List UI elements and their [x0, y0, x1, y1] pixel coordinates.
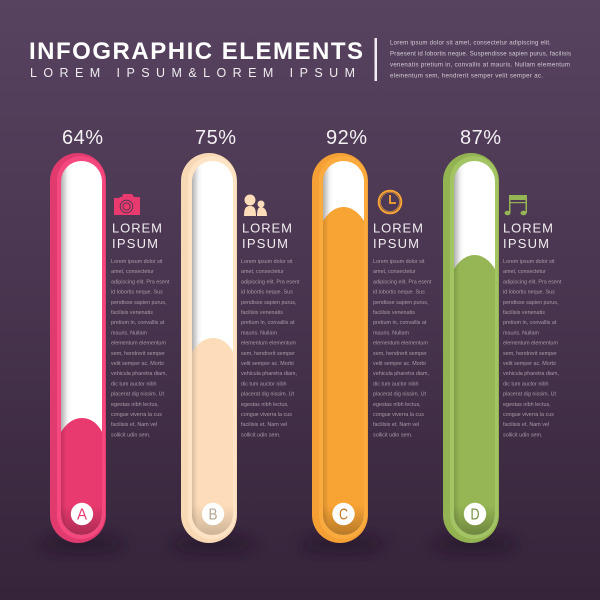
text block B: sollicit udin sem.	[241, 432, 281, 438]
icon: clock	[379, 191, 401, 213]
panel: bar A	[40, 127, 170, 553]
text block D: adipiscing elit. Pra esent	[503, 279, 562, 285]
text block B: dic tum auctor nibh	[241, 381, 287, 387]
text block B: pendisse sapien purus,	[241, 300, 297, 306]
text block A: Lorem ipsum dolor sit	[111, 259, 163, 265]
text block A: pendisse sapien purus,	[111, 300, 167, 306]
text block D: Lorem ipsum dolor sit	[503, 259, 555, 265]
title: INFOGRAPHIC ELEMENTS	[29, 38, 363, 65]
text block C: egestas nibh lectus,	[373, 402, 421, 408]
text block D: pretium in, convallis at	[503, 320, 557, 326]
text block C: sem, hendrerit semper	[373, 351, 427, 357]
percent label C: 92%	[326, 127, 367, 149]
text block B: Lorem ipsum dolor sit	[241, 259, 293, 265]
heading A: IPSUM	[112, 236, 158, 251]
text block B: vehicula pharetra diam,	[241, 371, 298, 377]
text block A: vehicula pharetra diam,	[111, 371, 168, 377]
text block A: pretium in, convallis at	[111, 320, 165, 326]
text block C: velit semper ac. Morbi	[373, 361, 426, 367]
text block D: sollicit udin sem.	[503, 432, 543, 438]
text block D: dic tum auctor nibh	[503, 381, 549, 387]
text block B: id lobortis neque. Sus	[241, 290, 293, 296]
bar fill B 75%	[192, 338, 233, 535]
text block A: mauris. Nullam	[111, 330, 147, 336]
text block B: adipiscing elit. Pra esent	[241, 279, 300, 285]
text block C: facilisis et. Nam vel	[373, 422, 419, 428]
text block B: pretium in, convallis at	[241, 320, 295, 326]
badge C	[332, 503, 355, 525]
text block B: facilisis venenatis	[241, 310, 283, 316]
text block B: egestas nibh lectus,	[241, 402, 289, 408]
heading B	[242, 220, 292, 251]
percent label B: 75%	[195, 127, 236, 149]
badge D: D	[470, 506, 480, 524]
badge A	[71, 503, 93, 525]
bar fill D 87%	[454, 255, 495, 535]
text block D: id lobortis neque. Sus	[503, 290, 555, 296]
text block A: sollicit udin sem.	[111, 432, 151, 438]
text block C: elementum elementum	[373, 341, 428, 347]
badge B	[202, 503, 224, 525]
intro text: Lorem ipsum dolor sit amet, consectetur adipiscing elit.	[390, 40, 551, 46]
heading D	[503, 220, 553, 251]
text block A: elementum elementum	[111, 341, 166, 347]
text block C: pretium in, convallis at	[373, 320, 427, 326]
text block D: mauris. Nullam	[503, 330, 539, 336]
heading B: LOREM	[242, 220, 292, 236]
text block D: congue viverra la cus	[503, 412, 554, 418]
text block D: placerat dig nissim. Ut	[503, 392, 557, 398]
text block B	[241, 259, 300, 438]
text block D: velit semper ac. Morbi	[503, 361, 556, 367]
icon: music notes	[504, 195, 527, 215]
bar fill C 92%	[323, 207, 364, 535]
text block C: mauris. Nullam	[373, 330, 409, 336]
percent label A: 64%	[62, 127, 103, 149]
text block D	[503, 259, 562, 438]
text block A: id lobortis neque. Sus	[111, 290, 163, 296]
text block D: amet, consectetur	[503, 269, 546, 275]
text block A	[111, 259, 170, 438]
heading D: IPSUM	[503, 236, 549, 251]
heading D: LOREM	[503, 220, 553, 236]
icon: people	[244, 194, 267, 216]
text block C	[373, 259, 432, 438]
text block C: pendisse sapien purus,	[373, 300, 429, 306]
text block C: amet, consectetur	[373, 269, 416, 275]
text block B: amet, consectetur	[241, 269, 284, 275]
bar fill A 64%	[61, 418, 102, 535]
intro text	[390, 40, 571, 80]
heading C	[373, 220, 423, 251]
text block D: sem, hendrerit semper	[503, 351, 557, 357]
bar track B	[192, 161, 233, 535]
title	[29, 38, 363, 80]
text block C: adipiscing elit. Pra esent	[373, 279, 432, 285]
text block C: placerat dig nissim. Ut	[373, 392, 427, 398]
panel: bar D	[432, 127, 562, 553]
badge C: C	[339, 506, 348, 524]
text block A: adipiscing elit. Pra esent	[111, 279, 170, 285]
text block B: placerat dig nissim. Ut	[241, 392, 295, 398]
badge B: B	[208, 506, 218, 524]
intro text: Praesent id lobortis neque. Suspendisse sapien purus, facilisis	[390, 50, 571, 58]
text block C: Lorem ipsum dolor sit	[373, 259, 425, 265]
text block D: facilisis et. Nam vel	[503, 422, 549, 428]
intro text: elementum sem, hendrerit semper velit semper ac.	[390, 72, 543, 80]
text block A: facilisis et. Nam vel	[111, 422, 157, 428]
heading B: IPSUM	[242, 236, 288, 251]
panel: bar B	[171, 127, 300, 553]
title: LOREM IPSUM&LOREM IPSUM	[30, 66, 355, 80]
icon: camera	[114, 194, 140, 215]
badge D	[464, 503, 486, 525]
heading A: LOREM	[112, 220, 162, 236]
text block C: congue viverra la cus	[373, 412, 424, 418]
bar track A	[61, 161, 102, 535]
text block A: congue viverra la cus	[111, 412, 162, 418]
intro text: venenatis pretium in, convallis at mauris. Nullam elementum	[390, 62, 570, 68]
text block D: vehicula pharetra diam,	[503, 371, 560, 377]
text block B: velit semper ac. Morbi	[241, 361, 294, 367]
percent label D: 87%	[460, 127, 501, 149]
text block C: id lobortis neque. Sus	[373, 290, 425, 296]
text block B: congue viverra la cus	[241, 412, 292, 418]
bar track D	[454, 161, 495, 535]
text block C: vehicula pharetra diam,	[373, 371, 430, 377]
text block A: placerat dig nissim. Ut	[111, 392, 165, 398]
text block A: sem, hendrerit semper	[111, 351, 165, 357]
text block C: sollicit udin sem.	[373, 432, 413, 438]
text block D: pendisse sapien purus,	[503, 300, 559, 306]
text block A: facilisis venenatis	[111, 310, 153, 316]
text block D: elementum elementum	[503, 341, 558, 347]
text block D: egestas nibh lectus,	[503, 402, 551, 408]
text block B: mauris. Nullam	[241, 330, 277, 336]
header divider	[374, 38, 377, 81]
heading C: LOREM	[373, 220, 423, 236]
panel: bar C	[301, 127, 432, 553]
text block C: facilisis venenatis	[373, 310, 415, 316]
text block A: velit semper ac. Morbi	[111, 361, 164, 367]
bar track C	[323, 161, 364, 535]
text block A: amet, consectetur	[111, 269, 154, 275]
text block A: dic tum auctor nibh	[111, 381, 157, 387]
text block B: sem, hendrerit semper	[241, 351, 295, 357]
text block A: egestas nibh lectus,	[111, 402, 159, 408]
text block B: facilisis et. Nam vel	[241, 422, 287, 428]
text block D: facilisis venenatis	[503, 310, 545, 316]
text block C: dic tum auctor nibh	[373, 381, 419, 387]
text block B: elementum elementum	[241, 341, 296, 347]
heading A	[112, 220, 162, 251]
badge A: A	[77, 506, 87, 524]
heading C: IPSUM	[373, 236, 419, 251]
